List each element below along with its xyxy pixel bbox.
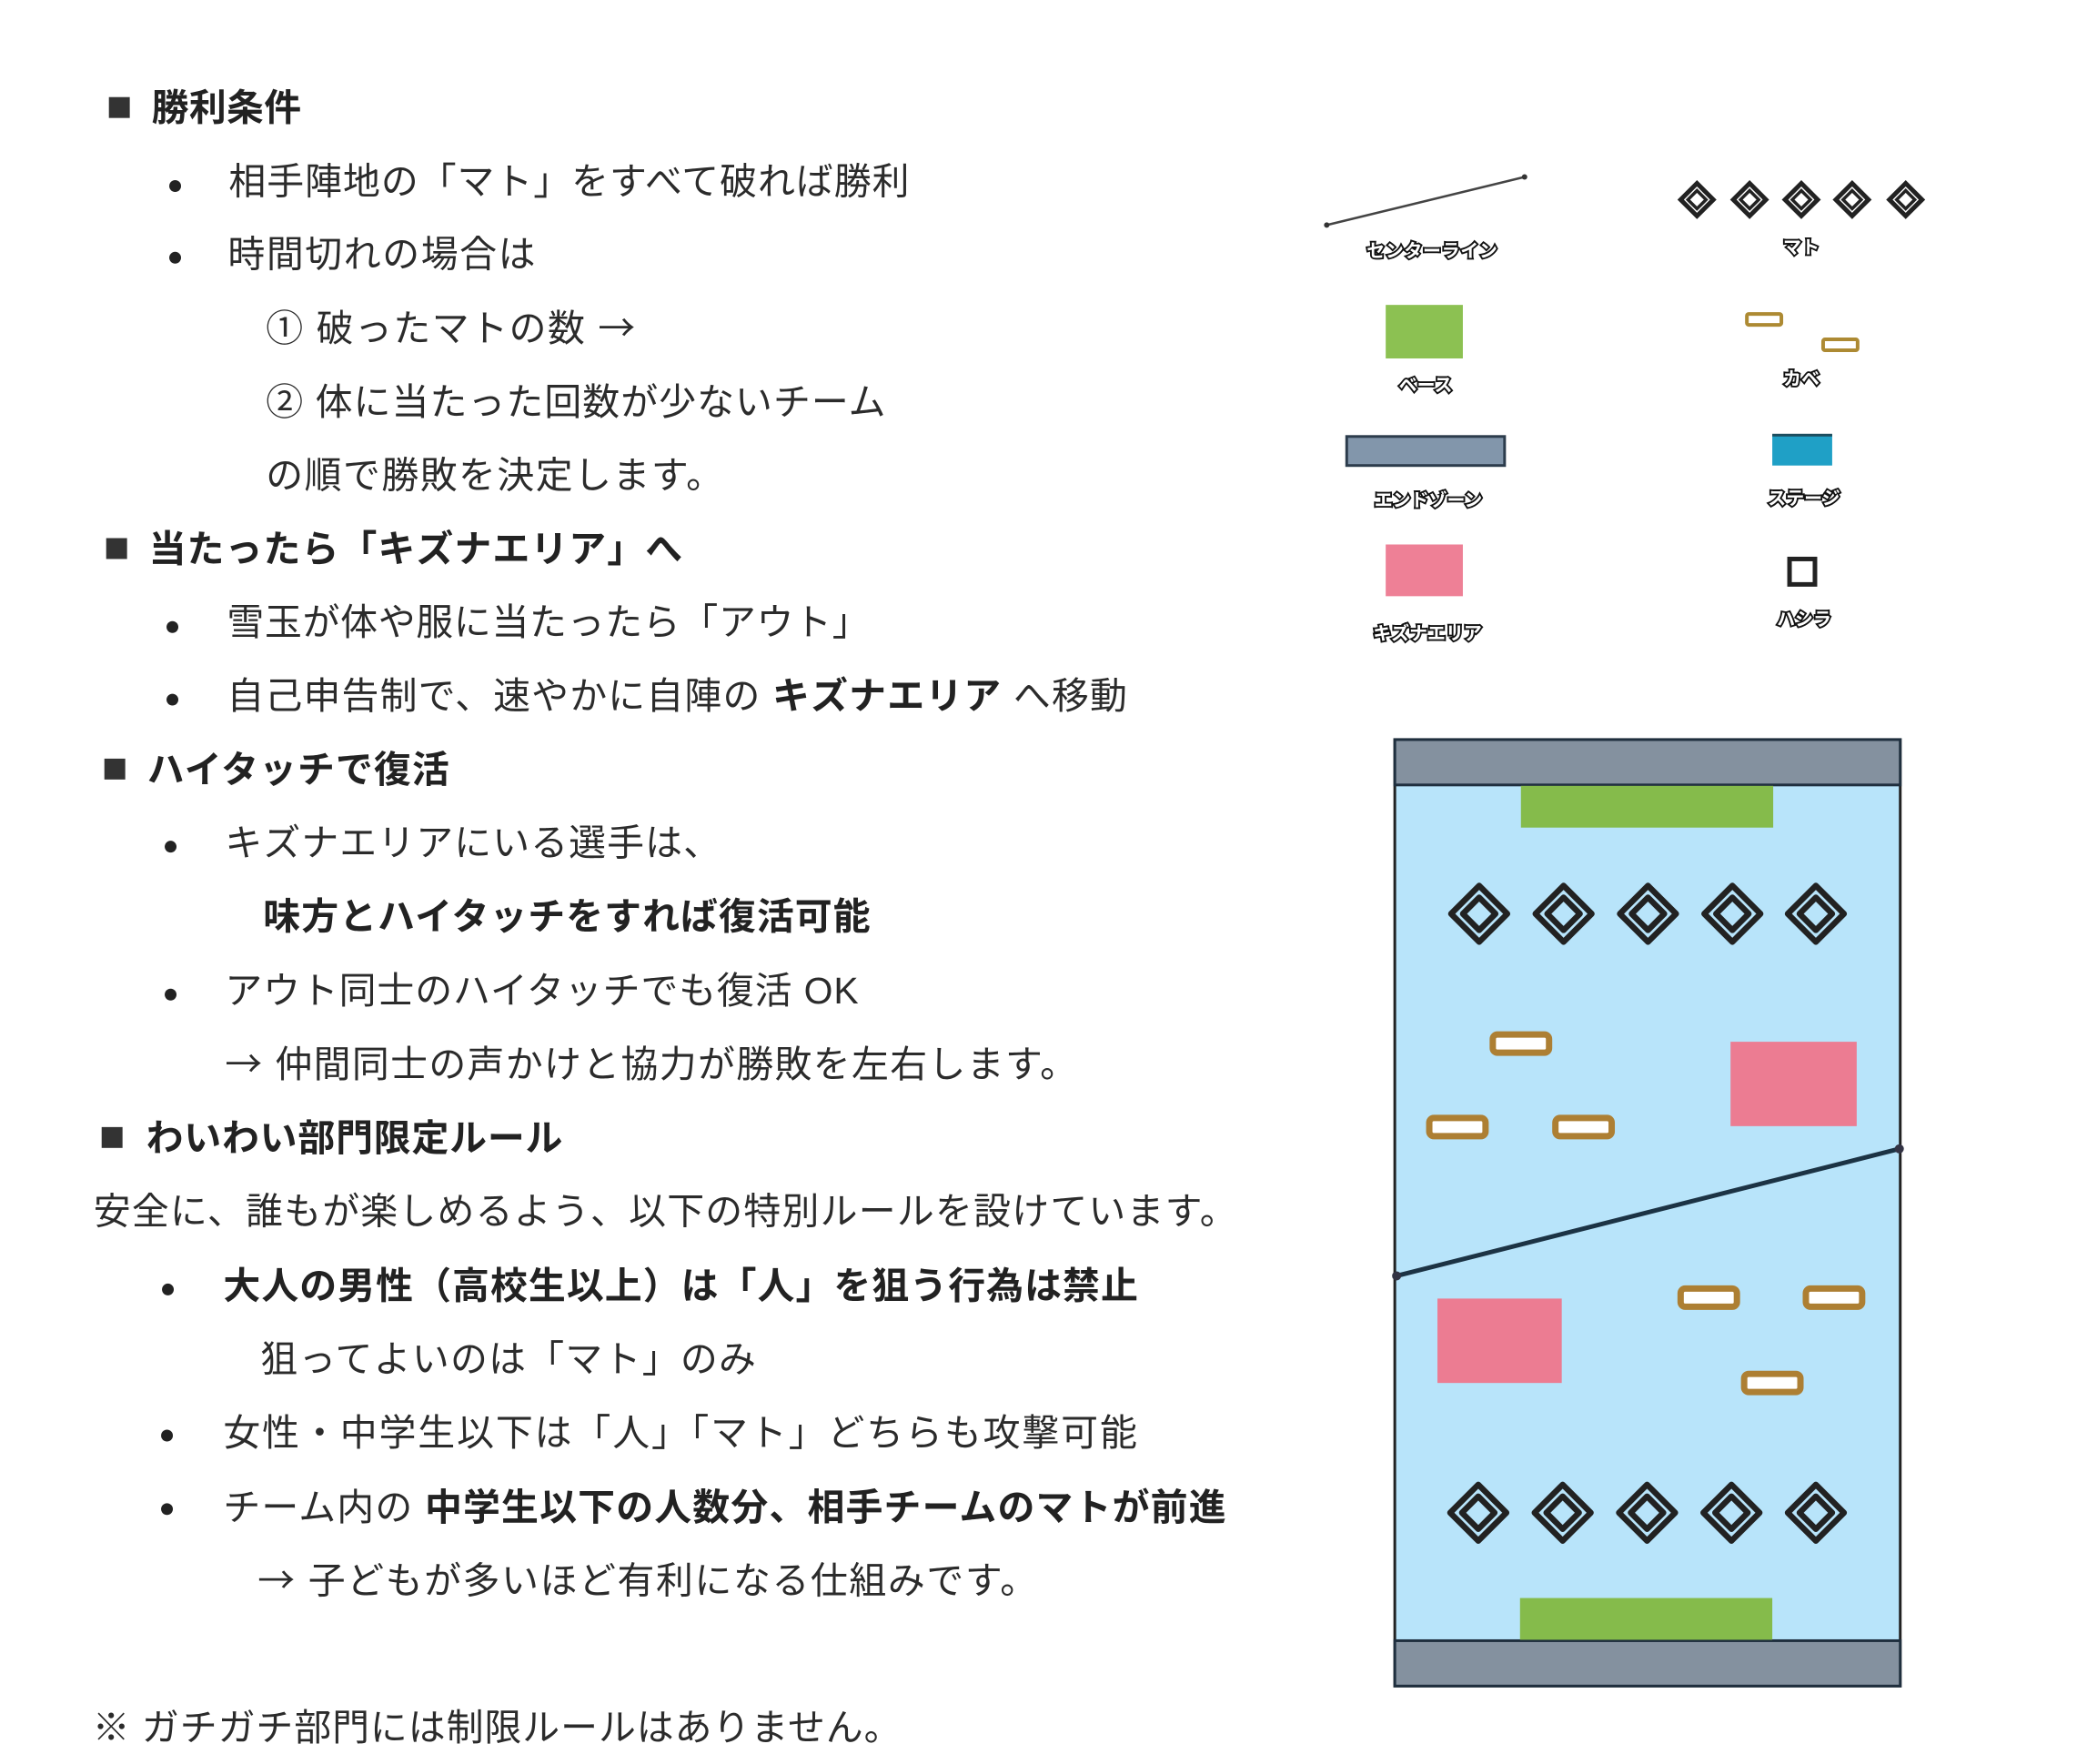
center line xyxy=(1392,1144,1904,1280)
text: children advantage: → 子どもが多いほど有利になる仕組みです。 xyxy=(257,1551,1037,1605)
text: adult male rule: 大人の男性（高校生以上）は「人」を狙う行為は禁止 xyxy=(223,1265,1138,1306)
text: women and juniors: 女性・中学生以下は「人」「マト」どちらも攻撃可能 xyxy=(223,1412,1137,1454)
legend: end zone: エンドゾーン xyxy=(1375,490,1482,511)
text: out when hit: 雪玉が体や服に当たったら「アウト」 xyxy=(227,601,870,643)
heading: ハイタッチで復活: ハイタッチで復活 xyxy=(147,749,449,791)
legend xyxy=(1324,175,1922,644)
legend: end zone xyxy=(1346,437,1505,511)
heading: 勝利条件: 勝利条件 xyxy=(152,87,301,129)
text: tiebreak two: ② 体に当たった回数が少ないチーム xyxy=(266,381,886,423)
section: high five revival xyxy=(105,749,1077,1088)
text: defeat all targets: 相手陣地の「マト」をすべて破れば勝利 xyxy=(228,160,909,202)
text: time out: 時間切れの場合は xyxy=(227,233,536,275)
section: waiwai division rules xyxy=(94,1117,1237,1605)
legend: pillar xyxy=(1777,559,1831,630)
legend: walls xyxy=(1747,314,1858,389)
text: move to kizuna area: 自己申告制で、速やかに自陣の キズナエリア へ移動 xyxy=(227,675,1127,717)
legend: targets: マト xyxy=(1783,237,1820,257)
legend: walls: カベ xyxy=(1783,369,1820,389)
text: cooperation: → 仲間同士の声かけと協力が勝敗を左右します。 xyxy=(225,1034,1077,1088)
text: players in kizuna area: キズナエリアにいる選手は、 xyxy=(225,822,721,864)
heading: 当たったら: 当たったら「キズナエリア」へ xyxy=(149,528,682,570)
text: decision order: の順で勝敗を決定します。 xyxy=(266,455,723,497)
bottom kizuna area xyxy=(1437,1298,1562,1383)
legend: center line xyxy=(1324,175,1527,261)
top kizuna area xyxy=(1730,1042,1857,1126)
text: out players high five: アウト同士のハイタッチでも復活 OK xyxy=(225,970,859,1012)
legend: pillar: ハシラ xyxy=(1777,610,1831,630)
legend: stage: ステージ xyxy=(1768,489,1840,509)
bottom walls xyxy=(1680,1288,1862,1392)
legend: base: ベース xyxy=(1399,376,1452,396)
legend: targets xyxy=(1680,183,1922,257)
legend: stage xyxy=(1768,434,1840,509)
top end zone xyxy=(1395,740,1900,785)
top targets xyxy=(1451,886,1844,942)
text: tiebreak one: ① 破ったマトの数 → xyxy=(266,298,635,352)
legend: kizuna area xyxy=(1373,544,1482,644)
legend: center line: センターライン xyxy=(1366,240,1497,261)
court field xyxy=(1395,740,1900,1686)
text: intro: 安全に、誰もが楽しめるよう、以下の特別ルールを設けています。 xyxy=(94,1191,1237,1233)
top base xyxy=(1521,786,1773,828)
court diagram xyxy=(1392,740,1904,1686)
note: gachi division: ※ ガチガチ部門には制限ルールはありません。 xyxy=(93,1707,902,1749)
legend: kizuna area: キズナエリア xyxy=(1373,622,1482,644)
heading: わいわい部門限定ルール: わいわい部門限定ルール xyxy=(146,1117,562,1159)
bottom targets xyxy=(1450,1485,1844,1541)
text: revival condition: 味方とハイタッチをすれば復活可能 xyxy=(263,895,871,937)
section: victory conditions xyxy=(109,87,909,497)
legend: base xyxy=(1386,305,1463,396)
section: when hit xyxy=(106,528,1127,717)
top walls xyxy=(1429,1034,1612,1136)
bottom base xyxy=(1520,1598,1772,1639)
text: target advance: チーム内の 中学生以下の人数分、相手チームのマトが前進 xyxy=(223,1487,1226,1528)
bottom end zone xyxy=(1395,1640,1900,1686)
text: targets only: 狙ってよいのは「マト」のみ xyxy=(260,1338,756,1380)
